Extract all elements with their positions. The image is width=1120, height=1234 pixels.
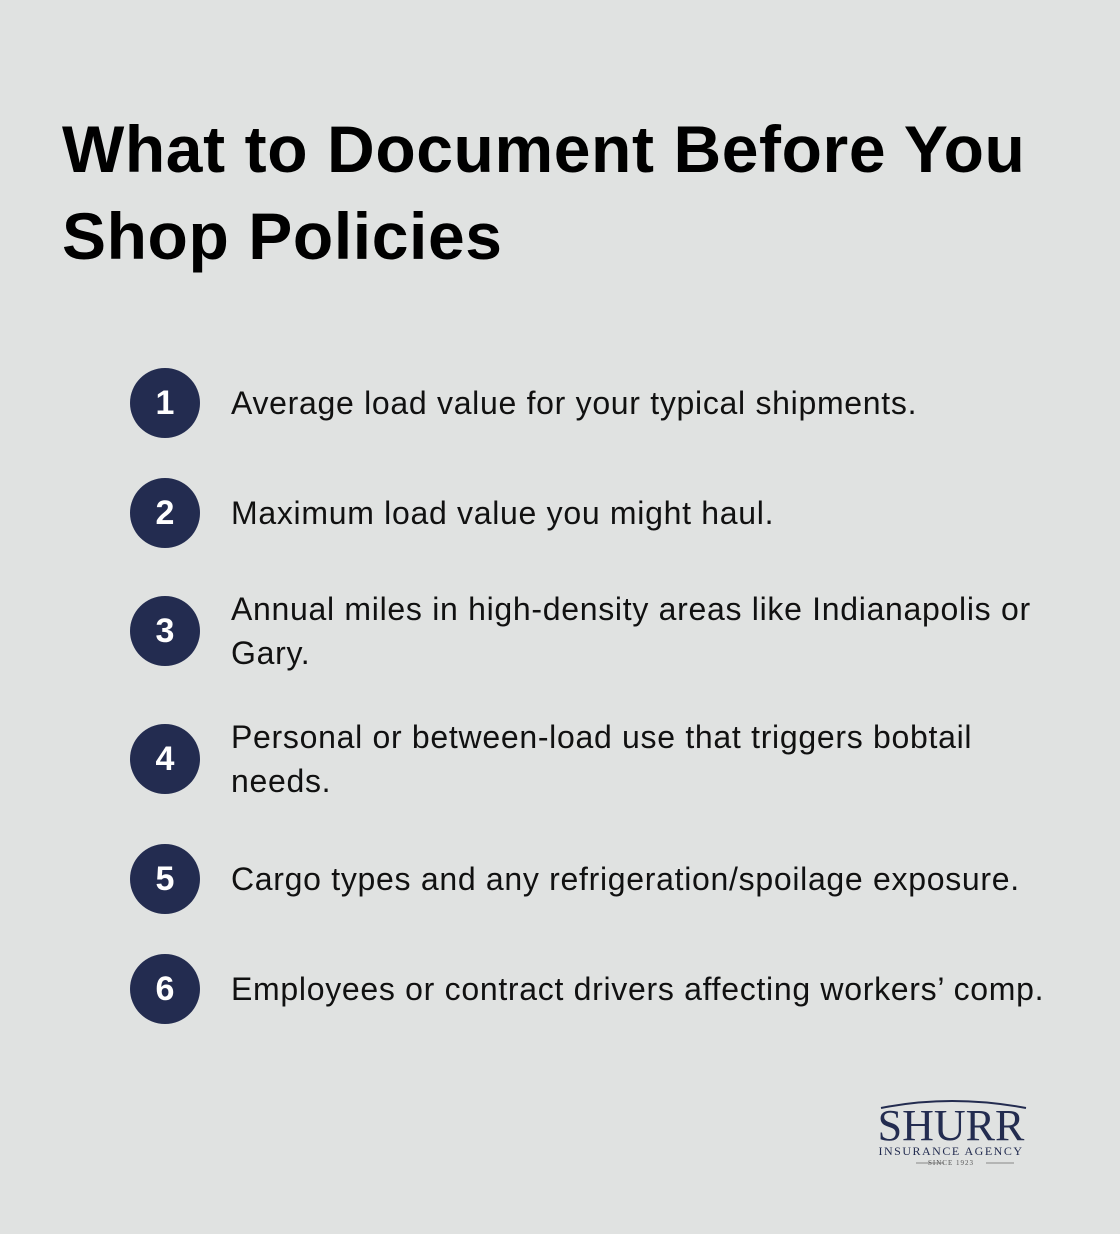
item 1: Average load value for your typical shipments. xyxy=(231,385,917,421)
item 2: Maximum load value you might haul. xyxy=(231,495,774,531)
item 4: Personal or between-load use that triggers bobtail needs. xyxy=(231,719,972,799)
item 1: 1 xyxy=(156,384,174,422)
logo: SHURR xyxy=(878,1101,1024,1150)
item 6 xyxy=(130,954,1044,1024)
logo: INSURANCE AGENCY xyxy=(878,1144,1024,1158)
item 5: Cargo types and any refrigeration/spoilage exposure. xyxy=(231,861,1020,897)
item 5 xyxy=(130,844,1020,914)
item 6: Employees or contract drivers affecting workers’ comp. xyxy=(231,971,1044,1007)
item 6: 6 xyxy=(156,970,174,1008)
item 5: 5 xyxy=(156,860,174,898)
title: Shop Policies xyxy=(62,199,503,273)
item 1 xyxy=(130,368,917,438)
title: What to Document Before You xyxy=(62,112,1025,186)
item 4: 4 xyxy=(156,740,174,778)
item 2: 2 xyxy=(156,494,174,532)
item 3: Annual miles in high-density areas like Indianapolis or Gary. xyxy=(231,591,1031,671)
item 2 xyxy=(130,478,774,548)
item 3: 3 xyxy=(156,612,174,650)
logo: SINCE 1923 xyxy=(928,1159,974,1167)
title xyxy=(62,112,1025,273)
